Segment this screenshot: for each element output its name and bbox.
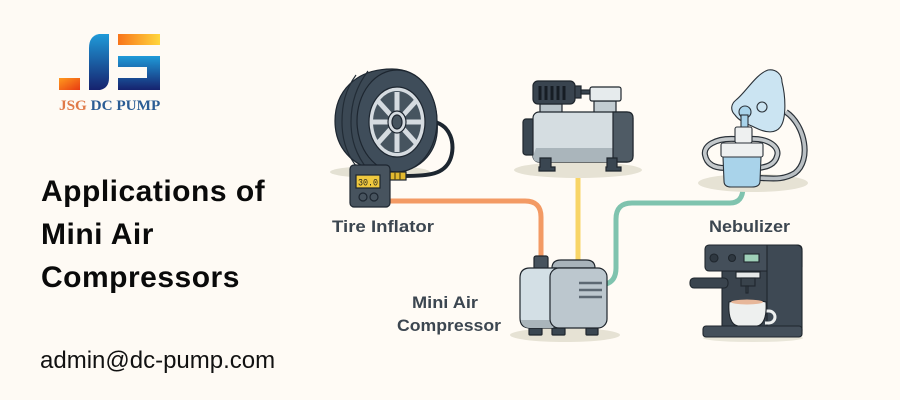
icon: tire inflator: 30.0: [358, 178, 378, 190]
label: nebulizer: Nebulizer: [709, 217, 790, 236]
title: Compressors: [41, 261, 240, 294]
title: Applications of: [41, 175, 265, 208]
icon: tire inflator: [330, 69, 452, 207]
icon: nebulizer: [698, 70, 808, 192]
icon: top air compressor: [514, 81, 642, 178]
title: [41, 175, 265, 294]
label: mini air compressor: Mini Air: [412, 293, 478, 312]
contact email: admin@dc-pump.com: [40, 347, 275, 374]
yellow line: top compressor to mini compressor: [576, 175, 580, 262]
title: Mini Air: [41, 218, 154, 251]
icon: coffee machine: [690, 245, 803, 342]
label: mini air compressor: Compressor: [397, 316, 501, 335]
teal line: nebulizer to compressor: [606, 187, 743, 284]
label: tire inflator: Tire Inflator: [332, 217, 434, 236]
logo: JSG DC PUMP: [59, 34, 160, 114]
orange line: tire inflator to compressor: [390, 201, 541, 262]
panel: diagram background: [280, 0, 900, 400]
icon: mini air compressor: [510, 256, 620, 342]
connector lines: [390, 175, 743, 284]
logo: JSG DC PUMP: JSG DC PUMP: [59, 97, 160, 114]
